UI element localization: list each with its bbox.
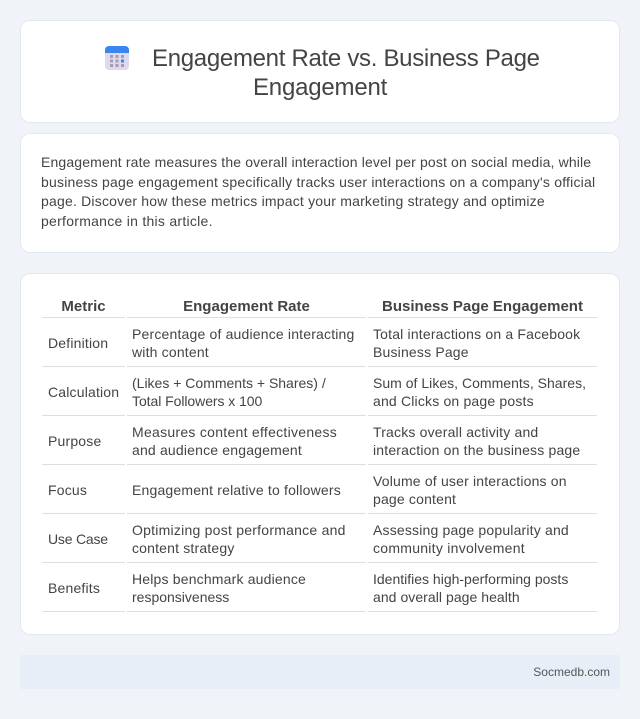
row: Use Case: content strategy	[132, 540, 234, 556]
text block: intro: Engagement rate measures the overall interaction level per post on social media, while	[41, 154, 591, 170]
icon: calendar	[105, 46, 129, 70]
row: Definition: Business Page	[373, 344, 469, 360]
row: Benefits: and overall page health	[373, 589, 520, 605]
row: Purpose: Tracks overall activity and	[373, 424, 538, 440]
heading: title line 1: Engagement Rate vs. Business Page	[152, 45, 540, 72]
row: Definition: Definition	[48, 335, 108, 351]
row: Use Case	[48, 522, 569, 556]
panel: intro card	[20, 133, 620, 253]
row: Use Case: community involvement	[373, 540, 525, 556]
row: Focus: page content	[373, 491, 456, 507]
text block: intro: performance in this article.	[41, 213, 213, 229]
row: Purpose: and audience engagement	[132, 442, 302, 458]
row: Definition: Total interactions on a Facebook	[373, 326, 580, 342]
panel: comparison table card	[20, 273, 620, 635]
text block: intro: page. Discover how these metrics impact your marketing strategy and optimize	[41, 193, 545, 209]
table header: Metric	[61, 298, 106, 315]
table header	[61, 298, 583, 315]
row: Purpose	[48, 424, 580, 458]
row: Use Case: Use Case	[48, 531, 108, 547]
row: Benefits	[48, 571, 568, 605]
row: Calculation	[48, 375, 586, 409]
row: Calculation: Calculation	[48, 384, 119, 400]
row: Calculation: and Clicks on page posts	[373, 393, 534, 409]
row: Use Case: Assessing page popularity and	[373, 522, 569, 538]
text block: intro: business page engagement specifically tracks user interactions on a company's official	[41, 174, 595, 190]
row: Focus: Engagement relative to followers	[132, 482, 341, 498]
row: Focus	[48, 473, 567, 507]
row: Purpose: Measures content effectiveness	[132, 424, 337, 440]
table header: Business Page Engagement	[382, 298, 583, 315]
footer bar	[20, 655, 620, 689]
row: Purpose: interaction on the business page	[373, 442, 580, 458]
row: Definition: Percentage of audience interacting	[132, 326, 354, 342]
row: Use Case: Optimizing post performance and	[132, 522, 346, 538]
row: Benefits: Benefits	[48, 580, 100, 596]
text block: intro	[41, 154, 595, 229]
row: Calculation: (Likes + Comments + Shares) /	[132, 375, 326, 391]
row: Focus: Volume of user interactions on	[373, 473, 567, 489]
row: Calculation: Sum of Likes, Comments, Shares,	[373, 375, 586, 391]
row: Benefits: Identifies high-performing posts	[373, 571, 568, 587]
footer credit: Socmedb.com	[533, 665, 610, 679]
row: Benefits: responsiveness	[132, 589, 229, 605]
row: Definition	[48, 326, 580, 360]
row: Focus: Focus	[48, 482, 87, 498]
row: Calculation: Total Followers x 100	[132, 393, 262, 409]
row: Benefits: Helps benchmark audience	[132, 571, 306, 587]
table header: Engagement Rate	[183, 298, 310, 315]
panel: title card	[20, 20, 620, 123]
row: Purpose: Purpose	[48, 433, 101, 449]
row: Definition: with content	[132, 344, 209, 360]
heading: title line 2: Engagement	[253, 74, 387, 101]
